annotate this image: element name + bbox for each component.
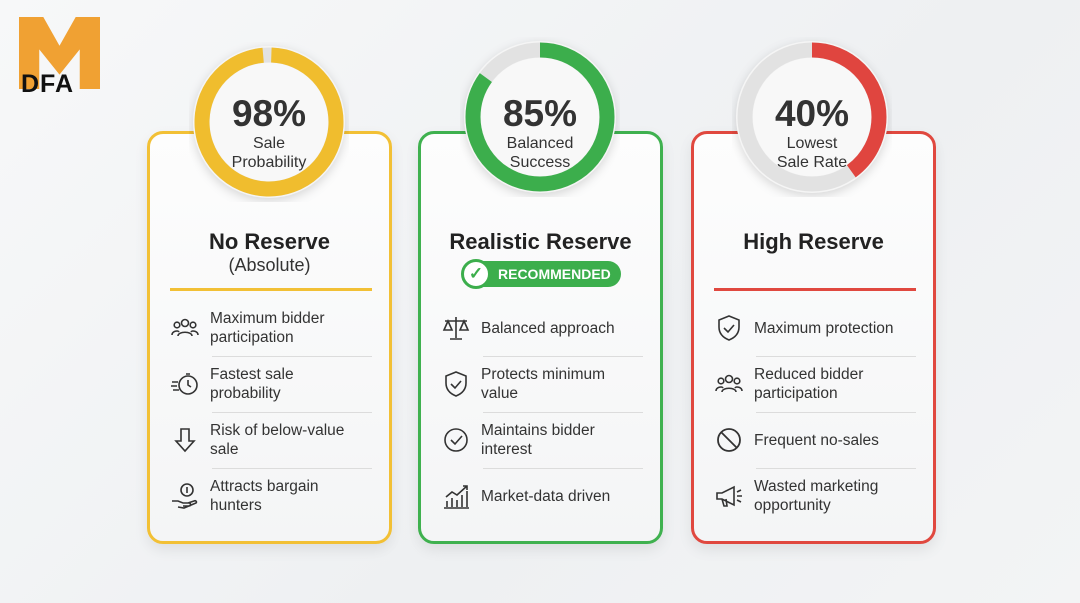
gauge: 85% [460, 40, 620, 197]
card: no reserve [147, 131, 392, 544]
item: risk: Risk of below-value sale [210, 422, 344, 458]
gauge: 40%: Lowest [787, 135, 838, 152]
title: High Reserve [743, 229, 884, 254]
badge: recommended: ✓ [469, 264, 483, 283]
gauge: 85%: Success [510, 154, 570, 171]
gauge: 40%: 40% [775, 93, 849, 134]
card: realistic reserve [418, 131, 663, 544]
badge: recommended [463, 261, 621, 287]
gauge: 98%: Sale [253, 135, 285, 152]
gauge: 85%: Balanced [507, 135, 573, 152]
gauge: 40% [732, 40, 892, 197]
badge: recommended: RECOMMENDED [498, 266, 611, 282]
gauge: 98%: Probability [232, 154, 306, 171]
gauge: 98% [190, 46, 348, 202]
item: fastest [171, 366, 294, 402]
logo [19, 17, 100, 98]
card: high reserve [691, 131, 936, 544]
logo: DFA [21, 70, 74, 98]
item: balanced: Balanced approach [481, 320, 615, 336]
item: balanced [442, 317, 615, 340]
item: no-sales [717, 428, 879, 452]
title: No Reserve [209, 229, 330, 254]
item: protects: Protects minimum value [481, 366, 605, 402]
item: fastest: Fastest sale probability [210, 366, 294, 402]
item: bargain: Attracts bargain hunters [210, 478, 319, 514]
item: reduced: Reduced bidder participation [754, 366, 863, 402]
item: market data: Market-data driven [481, 488, 610, 504]
item: market data [444, 485, 610, 509]
item: no-sales: Frequent no-sales [754, 432, 879, 448]
item: wasted: Wasted marketing opportunity [754, 478, 878, 514]
gauge: 85%: 85% [503, 93, 577, 134]
subtitle: (Absolute) [228, 255, 311, 275]
item: participation: Maximum bidder participation [210, 310, 325, 346]
title: Realistic Reserve [449, 229, 632, 254]
item: protection [718, 315, 894, 341]
gauge: 40%: Sale Rate [777, 154, 847, 171]
item: protection: Maximum protection [754, 320, 894, 336]
gauge: 98%: 98% [232, 93, 306, 134]
item: interest: Maintains bidder interest [481, 422, 595, 458]
